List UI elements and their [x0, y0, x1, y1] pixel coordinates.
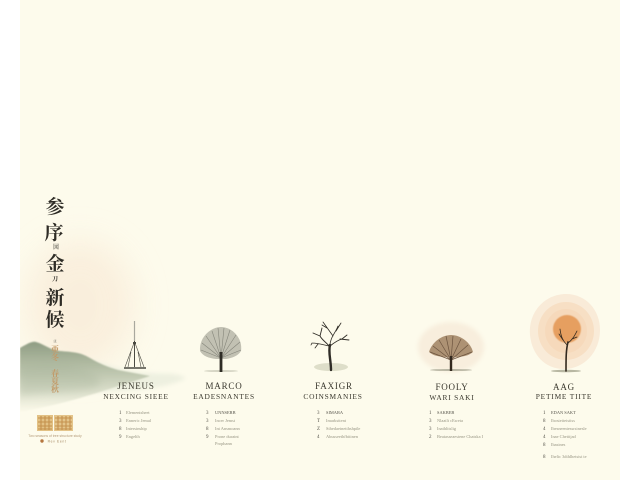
list: 3 — [206, 419, 209, 424]
list: Int Ansmoann — [215, 426, 241, 431]
list: Inae Chetitjad — [551, 434, 577, 439]
vertical calligraphy title: 刀 — [52, 276, 58, 283]
list: 2 — [429, 435, 432, 440]
vertical tan subtitle: 注 — [53, 338, 57, 343]
column 3: bare tree — [303, 322, 363, 440]
vertical calligraphy title: 参 — [45, 196, 65, 218]
list: Engelth — [126, 434, 140, 439]
list: SAKBEB — [437, 410, 454, 415]
list: 8 — [543, 455, 546, 460]
list: 3 — [429, 419, 432, 424]
list: 4 — [543, 427, 546, 432]
list — [206, 410, 241, 446]
list: 1 — [119, 411, 122, 416]
list: 8 — [206, 427, 209, 432]
list: Prone duraint — [215, 434, 240, 439]
vertical calligraphy title: 新 — [45, 287, 65, 309]
heading: Fooly: FOOLY — [435, 382, 469, 392]
vertical calligraphy title — [44, 196, 65, 331]
vertical calligraphy title: 候 — [45, 309, 65, 331]
list: Sthedaeinetthshpile — [326, 426, 360, 431]
vertical tan subtitle: 秋 — [51, 384, 59, 394]
heading: Petime Tiite: PETIME TIITE — [536, 392, 592, 401]
list: T — [317, 419, 320, 424]
heading: Jeneus: JENEUS — [117, 381, 155, 391]
list: Abusseethfbitinen — [326, 434, 359, 439]
heading: Nexcing Sieee: NEXCING SIEEE — [103, 392, 169, 401]
heading: Eadesnantes: EADESNANTES — [193, 392, 255, 401]
list: 3 — [429, 427, 432, 432]
gold seal stamps — [37, 415, 73, 431]
heading: Marco: MARCO — [205, 381, 243, 391]
icon: fan tree — [200, 327, 241, 372]
list: Inathlitslig — [437, 426, 457, 431]
icon: tower — [112, 321, 158, 371]
column 4: autumn fan tree — [418, 322, 484, 440]
vertical calligraphy title: 序 — [44, 222, 64, 244]
list: 4 — [543, 435, 546, 440]
list: Enneric Jemal — [126, 418, 152, 423]
list: Ibesneentessrsinesle — [551, 426, 587, 431]
list: UNNSERB — [215, 410, 236, 415]
seal caption: Two seasons of tree structure study — [28, 434, 82, 438]
list: Ihelic 3dthlhetsist te — [551, 454, 587, 459]
list: Z — [317, 427, 320, 432]
list: 8 — [543, 419, 546, 424]
peach wash — [27, 243, 133, 360]
column 2: fan tree — [193, 327, 255, 446]
list: 1 — [543, 411, 546, 416]
list: 9 — [206, 435, 209, 440]
list: EDAN SAKT — [551, 410, 576, 415]
mountain landscape — [20, 342, 186, 412]
vertical calligraphy title: 金 — [45, 253, 65, 275]
list: SIMARA — [326, 410, 344, 415]
list: 3 — [317, 411, 320, 416]
list: Ibasines — [551, 442, 566, 447]
list: 4 — [317, 435, 320, 440]
vertical tan subtitle: 夏 — [51, 376, 59, 386]
heading: Wari Saki: WARI SAKI — [429, 393, 475, 402]
list: Intersinship — [126, 426, 148, 431]
list — [317, 410, 360, 440]
heading: Aag: AAG — [553, 382, 575, 392]
vertical calligraphy title: 図 — [53, 243, 59, 251]
list: Ibosteiteistiss — [551, 418, 575, 423]
list: 1 — [429, 411, 432, 416]
list — [119, 410, 152, 440]
vertical tan subtitle: 亜 — [51, 344, 59, 354]
vertical tan subtitle: 春 — [51, 368, 59, 378]
list: 8 — [119, 427, 122, 432]
list: 3 — [119, 419, 122, 424]
list: Beatasseaestene Chatska I — [437, 434, 484, 439]
heading: Coinsmanies: COINSMANIES — [303, 392, 363, 401]
list — [429, 410, 484, 440]
icon: sun and tree — [530, 294, 600, 372]
column 1: tower — [103, 321, 169, 440]
list: Imarksttent — [326, 418, 347, 423]
icon: tinted fan tree — [418, 322, 484, 372]
list: Nlaatlt cEsreta — [437, 418, 463, 423]
list: Elementsheet — [126, 410, 150, 415]
list: Incer Jemst — [215, 418, 236, 423]
list: 8 — [543, 443, 546, 448]
column 5: orange sun tree — [530, 294, 600, 460]
vertical tan subtitle: 冬 — [51, 352, 59, 362]
list: 9 — [119, 435, 122, 440]
seal caption — [28, 434, 82, 444]
vertical tan subtitle — [51, 338, 59, 394]
list: Prophann — [215, 441, 233, 446]
list: 3 — [206, 411, 209, 416]
seal caption: Rev Eent — [48, 440, 66, 444]
list — [543, 410, 587, 460]
heading: Faxigr: FAXIGR — [315, 381, 353, 391]
icon: bare tree — [311, 322, 349, 371]
